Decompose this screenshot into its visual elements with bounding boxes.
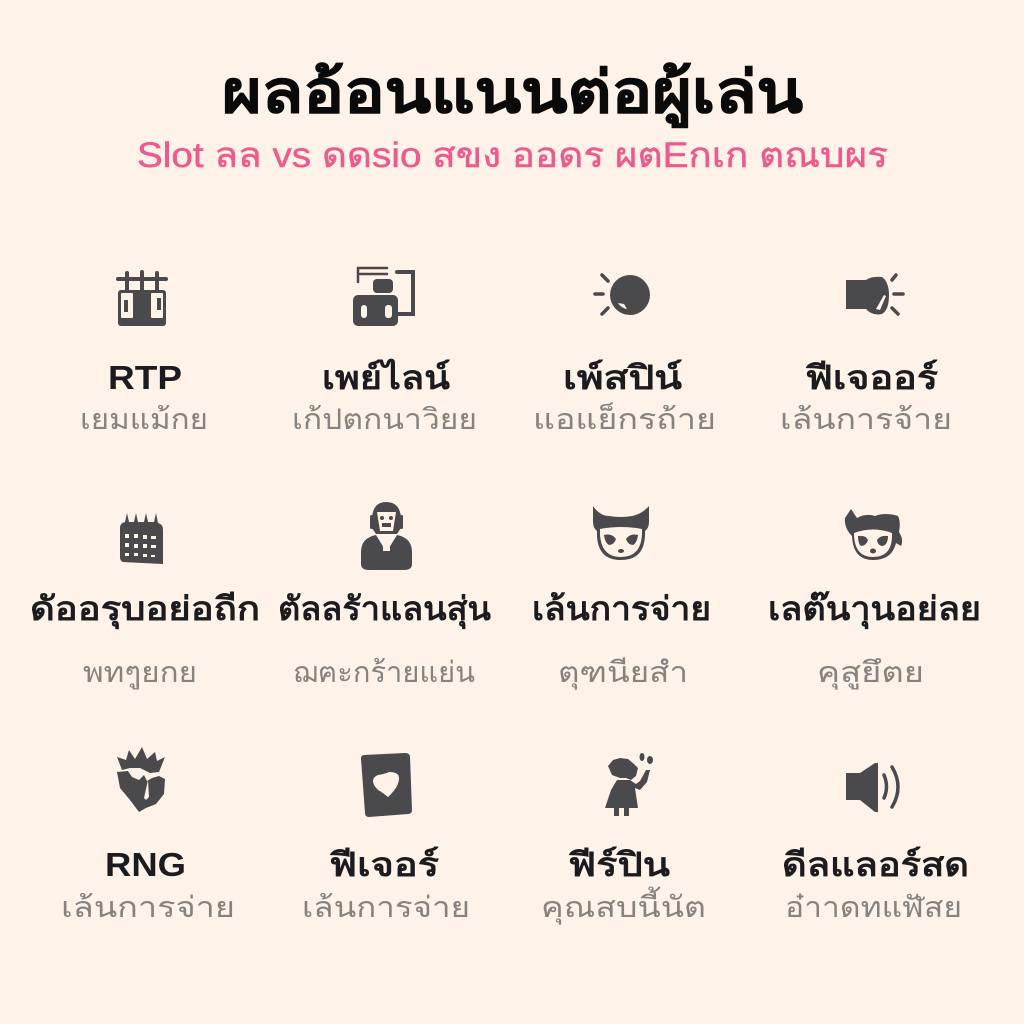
icon: mug with flag: [353, 268, 413, 326]
description: เก้ปตกนาวิยย: [292, 404, 477, 436]
item: dealer bust: [278, 502, 491, 689]
heading: ฟีเจอร์: [329, 846, 439, 883]
icon: cat mask: [593, 506, 649, 560]
heading: เพย์ไลน์: [322, 358, 451, 396]
icon: flash lamp: [846, 275, 903, 314]
subtitle: Slot ลล vs ดดsio สขง ออดร ผตEกเก ตณบผร: [137, 136, 888, 175]
heading: RTP: [108, 359, 182, 396]
heading: เล้นการจ่าย: [532, 590, 711, 627]
heading: RNG: [105, 846, 186, 883]
icon: slot reels: [118, 272, 166, 326]
heading: ดัออรุบอย่อถีก: [30, 590, 260, 630]
item: calendar: [30, 513, 260, 690]
description: คุณสบนี้นัต: [541, 886, 706, 925]
item: live dealer: [782, 763, 969, 924]
heading: ฟีร์ปิน: [568, 846, 671, 883]
heading: เพ์สปิน์: [563, 359, 683, 396]
heading: ฟีเจออร์: [805, 359, 938, 396]
item: free spin: [541, 753, 706, 925]
description: เยมแม้กย: [80, 404, 208, 436]
item: RNG: [61, 747, 235, 924]
item: RTP: [80, 272, 208, 436]
description: คุสูยึตย: [817, 657, 924, 690]
item: feature: [780, 275, 952, 436]
icon: calendar: [120, 513, 163, 564]
description: พทๆูยกย: [83, 657, 197, 690]
heading: เลต๊นาุนอย่ลย: [768, 590, 981, 630]
description: ตุฑนียสำ: [558, 657, 688, 690]
description: ฌฅะกร้ายแย่น: [293, 657, 475, 689]
item: cat mask: [532, 506, 711, 690]
heading: ดีลแลอร์สด: [782, 846, 969, 883]
item: feature card: [302, 753, 470, 924]
description: เล้นการจ้าย: [780, 404, 952, 436]
icon: figure with balloons: [605, 753, 653, 816]
description: เล้นการจ่าย: [61, 892, 235, 924]
icon: glowing ball: [595, 275, 650, 315]
description: แอแย็กรถ้าย: [533, 401, 716, 436]
title: ผลอ้อนแนนต่อผู้เล่น: [222, 60, 803, 128]
icon: speaker: [846, 763, 898, 812]
heading: ตัลลรัาแลนสุ่น: [278, 590, 491, 630]
item: paylines: [292, 268, 477, 436]
icon: card with heart: [361, 753, 412, 817]
description: เล้นการจ่าย: [302, 892, 470, 924]
icon: crown shield: [117, 747, 165, 812]
icon: person: [361, 502, 412, 570]
item: spins: [533, 275, 716, 436]
icon: face with hair: [845, 509, 902, 560]
item: hair face: [768, 509, 981, 690]
description: อ๋าาดทแฬัสย: [785, 892, 962, 924]
